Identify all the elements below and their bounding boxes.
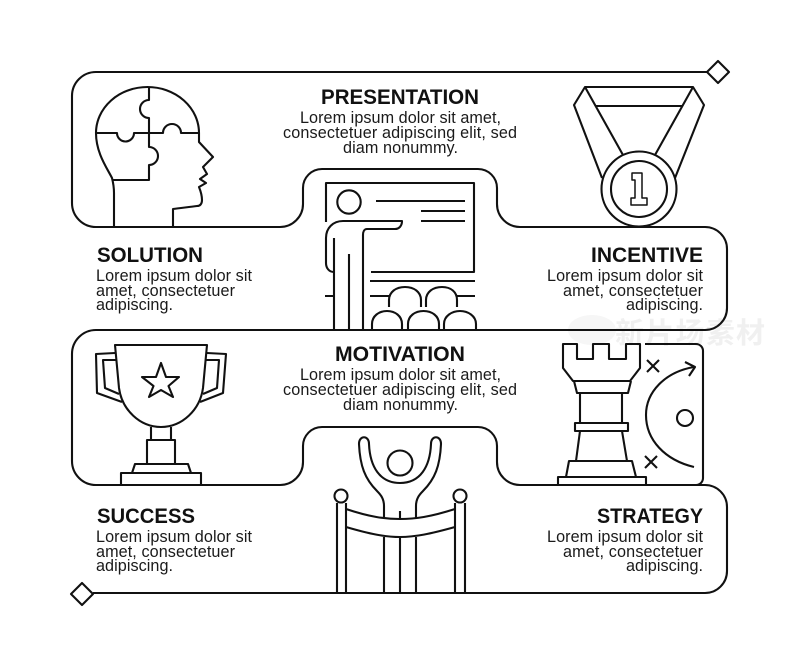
text block: strategy: adipiscing. [626, 557, 703, 575]
text block: incentive: Lorem ipsum dolor sit [547, 267, 704, 285]
text block: solution: amet, consectetuer [96, 282, 236, 300]
text block: incentive: amet, consectetuer [563, 282, 704, 300]
text block: solution: SOLUTION [97, 243, 203, 267]
icon: medal [574, 87, 704, 226]
icon: presenter with audience [325, 183, 476, 330]
text block: strategy: STRATEGY [597, 504, 703, 528]
text block: strategy: amet, consectetuer [563, 543, 704, 561]
icon: winner at ribbon [334, 437, 466, 593]
text block: success: amet, consectetuer [96, 543, 236, 561]
text block: success: Lorem ipsum dolor sit [96, 528, 252, 546]
text block: presentation: consectetuer adipiscing elit, sed [283, 124, 517, 142]
text block: solution: adipiscing. [96, 296, 173, 314]
icon: trophy [96, 345, 226, 485]
text block: incentive: adipiscing. [626, 296, 703, 314]
text block: success: adipiscing. [96, 557, 173, 575]
text block: presentation: diam nonummy. [343, 139, 458, 157]
watermark: 新片场素材 [615, 317, 765, 350]
connecting outline path [72, 72, 727, 593]
text block: solution [96, 243, 252, 314]
icon: top right diamond [707, 61, 729, 83]
text block: presentation [283, 85, 517, 157]
text block: incentive [547, 243, 704, 314]
text block: presentation: Lorem ipsum dolor sit amet, [300, 109, 501, 127]
text block: success: SUCCESS [97, 504, 195, 528]
text block: success [96, 504, 252, 575]
text block: strategy: Lorem ipsum dolor sit [547, 528, 704, 546]
watermark [568, 315, 765, 350]
text block: motivation: consectetuer adipiscing elit, sed [283, 381, 517, 399]
icon: chess rook [558, 344, 646, 485]
text block: motivation: MOTIVATION [335, 342, 465, 366]
text block: presentation: PRESENTATION [321, 85, 479, 109]
text block: motivation: Lorem ipsum dolor sit amet, [300, 366, 501, 384]
text block: strategy [547, 504, 704, 575]
icon: head with puzzle [96, 87, 213, 227]
icon: strategy board [645, 344, 703, 485]
text block: motivation: diam nonummy. [343, 396, 458, 414]
text block: solution: Lorem ipsum dolor sit [96, 267, 252, 285]
text block: motivation [283, 342, 517, 414]
icon: bottom left diamond [71, 583, 93, 605]
text block: incentive: INCENTIVE [591, 243, 703, 267]
